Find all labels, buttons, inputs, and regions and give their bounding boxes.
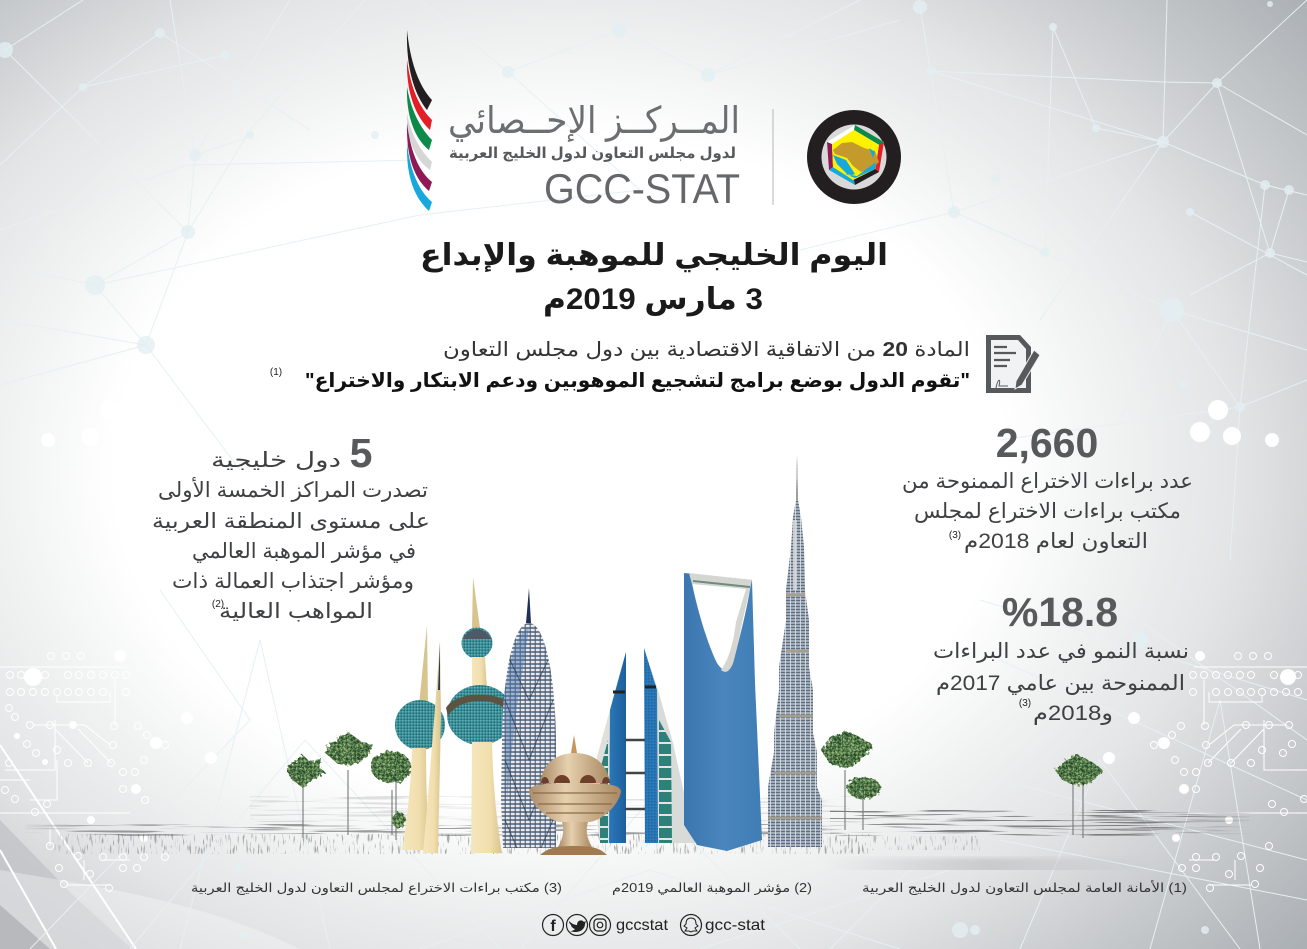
title: 3 مارس 2019م — [543, 283, 763, 317]
title: اليوم الخليجي للموهبة والإبداع — [420, 239, 888, 273]
icon: snapchat — [680, 914, 702, 936]
logo: GCC-STAT ribbons — [407, 30, 432, 211]
social media handles — [542, 914, 766, 936]
icon: document and pen — [986, 335, 1040, 393]
footnotes: (1) الأمانة العامة لمجلس التعاون لدول الخليج العربية — [862, 880, 1187, 896]
stat: 18.8% growth: %18.8 — [1002, 589, 1118, 635]
article text: المادة 20 من الاتفاقية الاقتصادية بين دول مجلس التعاون — [443, 339, 970, 361]
stat: left five Gulf countries: دول خليجية — [211, 449, 341, 472]
circuit board right — [1150, 652, 1307, 892]
stat: 2,660 patents: 2,660 — [996, 420, 1098, 466]
stat: 18.8% growth: الممنوحة بين عامي 2017م — [936, 672, 1185, 695]
glowing dots — [14, 400, 1296, 842]
logo: GCC-STAT wordmark: GCC-STAT — [544, 165, 740, 212]
stat: 2,660 patents — [902, 420, 1193, 553]
icon: facebook — [542, 914, 564, 936]
landmark: Burj Doha — [501, 588, 556, 848]
icon: facebook: f — [550, 918, 556, 935]
footnotes — [191, 880, 1187, 896]
ground sketch lines and grass — [25, 796, 1250, 874]
footnotes: (2) مؤشر الموهبة العالمي 2019م — [612, 881, 812, 896]
landmark: incense burner monument — [529, 735, 621, 855]
icon: GCC emblem — [807, 110, 901, 204]
icon: twitter — [566, 914, 588, 936]
logo: Arabic name — [448, 100, 740, 162]
stat: 2,660 patents: مكتب براءات الاختراع لمجلس — [914, 500, 1181, 523]
title — [420, 239, 888, 317]
logo: Arabic name: المــركــز الإحــصائي — [448, 100, 740, 142]
stat: left five Gulf countries: على مستوى المنطقة العربية — [152, 510, 430, 533]
stat: 18.8% growth: و2018م — [1033, 702, 1113, 725]
landmark: Bahrain World Trade Center — [596, 648, 695, 843]
stat: 18.8% growth — [933, 589, 1189, 725]
footnotes: (3) مكتب براءات الاختراع لمجلس التعاون لدول الخليج العربية — [191, 881, 562, 896]
stat: left five Gulf countries: ومؤشر اجتذاب العمالة ذات — [172, 570, 414, 593]
stat: left five Gulf countries: (2) — [212, 599, 224, 610]
stat: left five Gulf countries: تصدرت المراكز الخمسة الأولى — [158, 477, 428, 502]
landmark: Kuwait Towers — [395, 577, 514, 853]
icon: instagram — [590, 914, 610, 936]
handle: gccstat: gccstat — [616, 917, 669, 934]
circuit board left — [0, 652, 168, 892]
handle: gcc-stat: gcc-stat — [705, 917, 766, 934]
logo: Arabic name: لدول مجلس التعاون لدول الخليج العربية — [449, 145, 736, 162]
stat: 2,660 patents: عدد براءات الاختراع الممنوحة من — [902, 470, 1193, 493]
stat: left five Gulf countries: في مؤشر الموهبة العالمي — [192, 540, 416, 563]
stat: 18.8% growth: نسبة النمو في عدد البراءات — [933, 640, 1189, 663]
stat: left five Gulf countries: المواهب العالية — [219, 600, 373, 623]
article text: (1) — [270, 367, 282, 378]
stat: 2,660 patents: (3) — [949, 530, 961, 541]
trees — [286, 731, 1103, 840]
stat: 2,660 patents: التعاون لعام 2018م — [964, 530, 1148, 553]
stat: left five Gulf countries — [152, 430, 430, 623]
landmark: Kingdom Centre — [684, 573, 762, 851]
stat: left five Gulf countries: 5 — [350, 430, 372, 476]
landmark: Burj Khalifa — [768, 455, 822, 847]
article text — [270, 339, 970, 392]
stat: 18.8% growth: (3) — [1019, 698, 1031, 709]
logo divider — [772, 109, 774, 205]
article text: "تقوم الدول بوضع برامج لتشجيع الموهوبين ودعم الابتكار والاختراع" — [305, 370, 970, 392]
